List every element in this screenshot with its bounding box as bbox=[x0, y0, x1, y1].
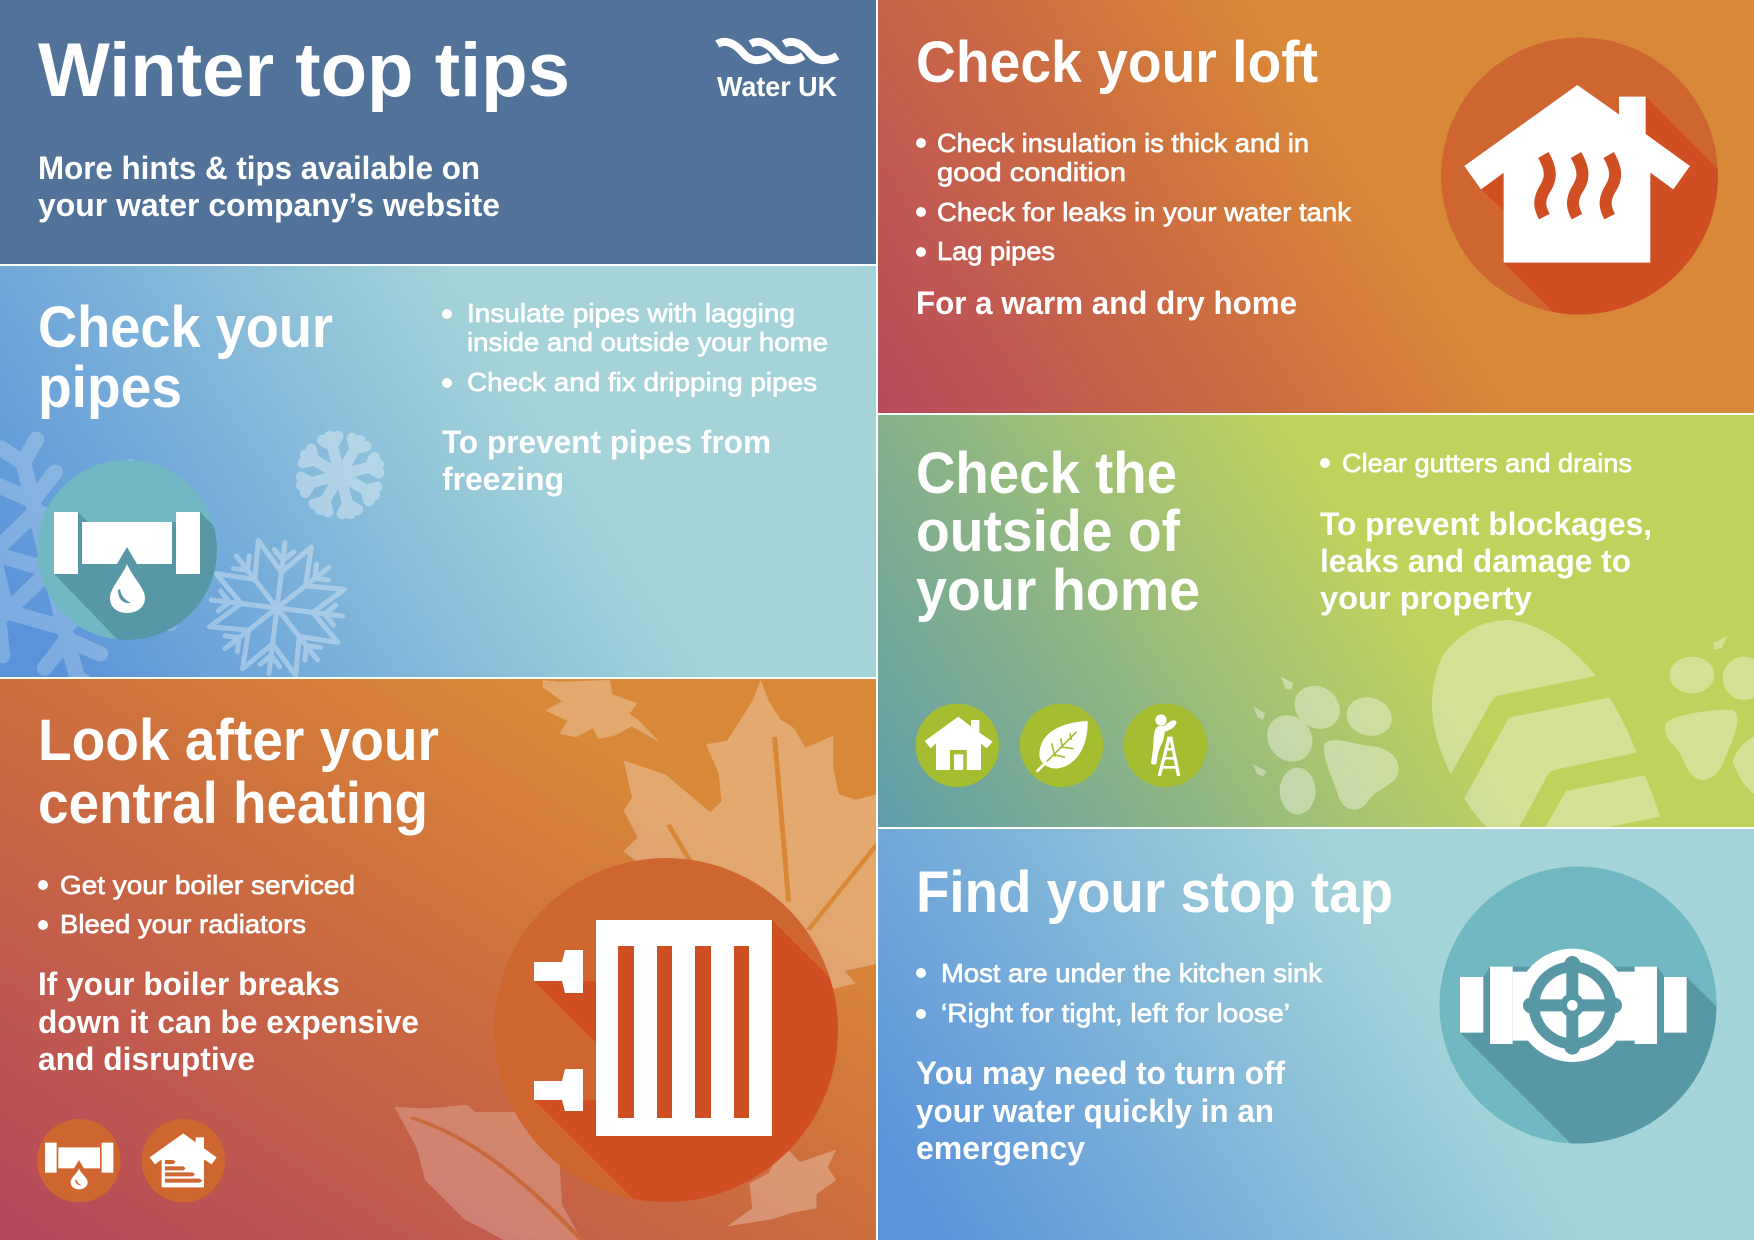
bullet list bbox=[442, 298, 828, 397]
heading: Look after your bbox=[38, 708, 439, 773]
statement: down it can be expensive bbox=[38, 1004, 419, 1040]
bullet list: ‘Right for tight, left for loose’ bbox=[941, 998, 1290, 1028]
icon: stop tap valve bbox=[1440, 866, 1727, 1144]
heading bbox=[916, 441, 1200, 623]
bullet list bbox=[38, 870, 355, 939]
bullet list: Insulate pipes with lagging bbox=[467, 298, 795, 328]
panel: header bbox=[0, 0, 876, 264]
icon: heated house bbox=[1441, 38, 1723, 320]
heading bbox=[38, 708, 439, 836]
heading: pipes bbox=[38, 355, 182, 420]
panel: check your loft bbox=[878, 0, 1754, 413]
bullet list: Bleed your radiators bbox=[60, 909, 306, 939]
statement: You may need to turn off bbox=[916, 1055, 1285, 1091]
bullet list: inside and outside your home bbox=[467, 327, 828, 357]
heading: Check your bbox=[38, 295, 333, 360]
bullet list: Lag pipes bbox=[937, 236, 1055, 266]
statement: To prevent pipes from bbox=[442, 424, 771, 460]
heading: your home bbox=[916, 558, 1200, 623]
subtitle bbox=[38, 150, 500, 223]
heading: central heating bbox=[38, 771, 428, 836]
heading: Find your stop tap bbox=[916, 860, 1393, 925]
statement: For a warm and dry home bbox=[916, 285, 1297, 321]
statement: To prevent blockages, bbox=[1320, 506, 1652, 542]
icon: green house bbox=[916, 704, 999, 787]
statement: and disruptive bbox=[38, 1041, 255, 1077]
icon: small house with energy bars bbox=[142, 1119, 225, 1202]
bullet list bbox=[916, 958, 1323, 1028]
autumn leaves background bbox=[394, 680, 877, 1240]
heading: Check your loft bbox=[916, 30, 1318, 95]
panel: look after your central heating bbox=[0, 679, 877, 1240]
bullet list: Get your boiler serviced bbox=[60, 870, 355, 900]
icon: radiator bbox=[494, 858, 838, 1202]
statement: your water quickly in an bbox=[916, 1093, 1274, 1129]
bullet list bbox=[916, 128, 1352, 266]
panel: check the outside of your home bbox=[878, 415, 1754, 827]
statement: emergency bbox=[916, 1130, 1085, 1166]
paw prints and boot print background bbox=[1253, 620, 1754, 827]
statement: leaks and damage to bbox=[1320, 543, 1631, 579]
statement bbox=[442, 424, 771, 497]
heading: Check the bbox=[916, 441, 1177, 506]
heading bbox=[38, 295, 333, 420]
bullet list: Check insulation is thick and in bbox=[937, 128, 1309, 158]
logo: Water UK bbox=[717, 42, 837, 102]
statement: If your boiler breaks bbox=[38, 966, 340, 1002]
snowflakes background bbox=[0, 430, 384, 677]
panel: check your pipes bbox=[0, 266, 876, 677]
statement bbox=[916, 1055, 1285, 1166]
panel: find your stop tap bbox=[878, 829, 1754, 1240]
icon: person on ladder bbox=[1124, 704, 1207, 787]
subtitle: More hints & tips available on bbox=[38, 150, 480, 186]
statement: your property bbox=[1320, 580, 1532, 616]
title: Winter top tips bbox=[38, 28, 570, 113]
logo: Water UK: Water UK bbox=[717, 71, 837, 102]
icon: small dripping pipe bbox=[37, 1119, 121, 1202]
statement: freezing bbox=[442, 461, 564, 497]
icon: leaf bbox=[1020, 704, 1103, 787]
statement bbox=[1320, 506, 1652, 616]
bullet list: good condition bbox=[937, 157, 1126, 187]
heading: outside of bbox=[916, 499, 1181, 564]
bullet list: Most are under the kitchen sink bbox=[941, 958, 1323, 988]
statement bbox=[38, 966, 419, 1077]
icon: dripping pipe bbox=[37, 460, 217, 640]
bullet list: Check for leaks in your water tank bbox=[937, 197, 1352, 227]
bullet list: Check and fix dripping pipes bbox=[467, 367, 817, 397]
subtitle: your water company’s website bbox=[38, 187, 500, 223]
bullet list: Clear gutters and drains bbox=[1342, 448, 1632, 478]
